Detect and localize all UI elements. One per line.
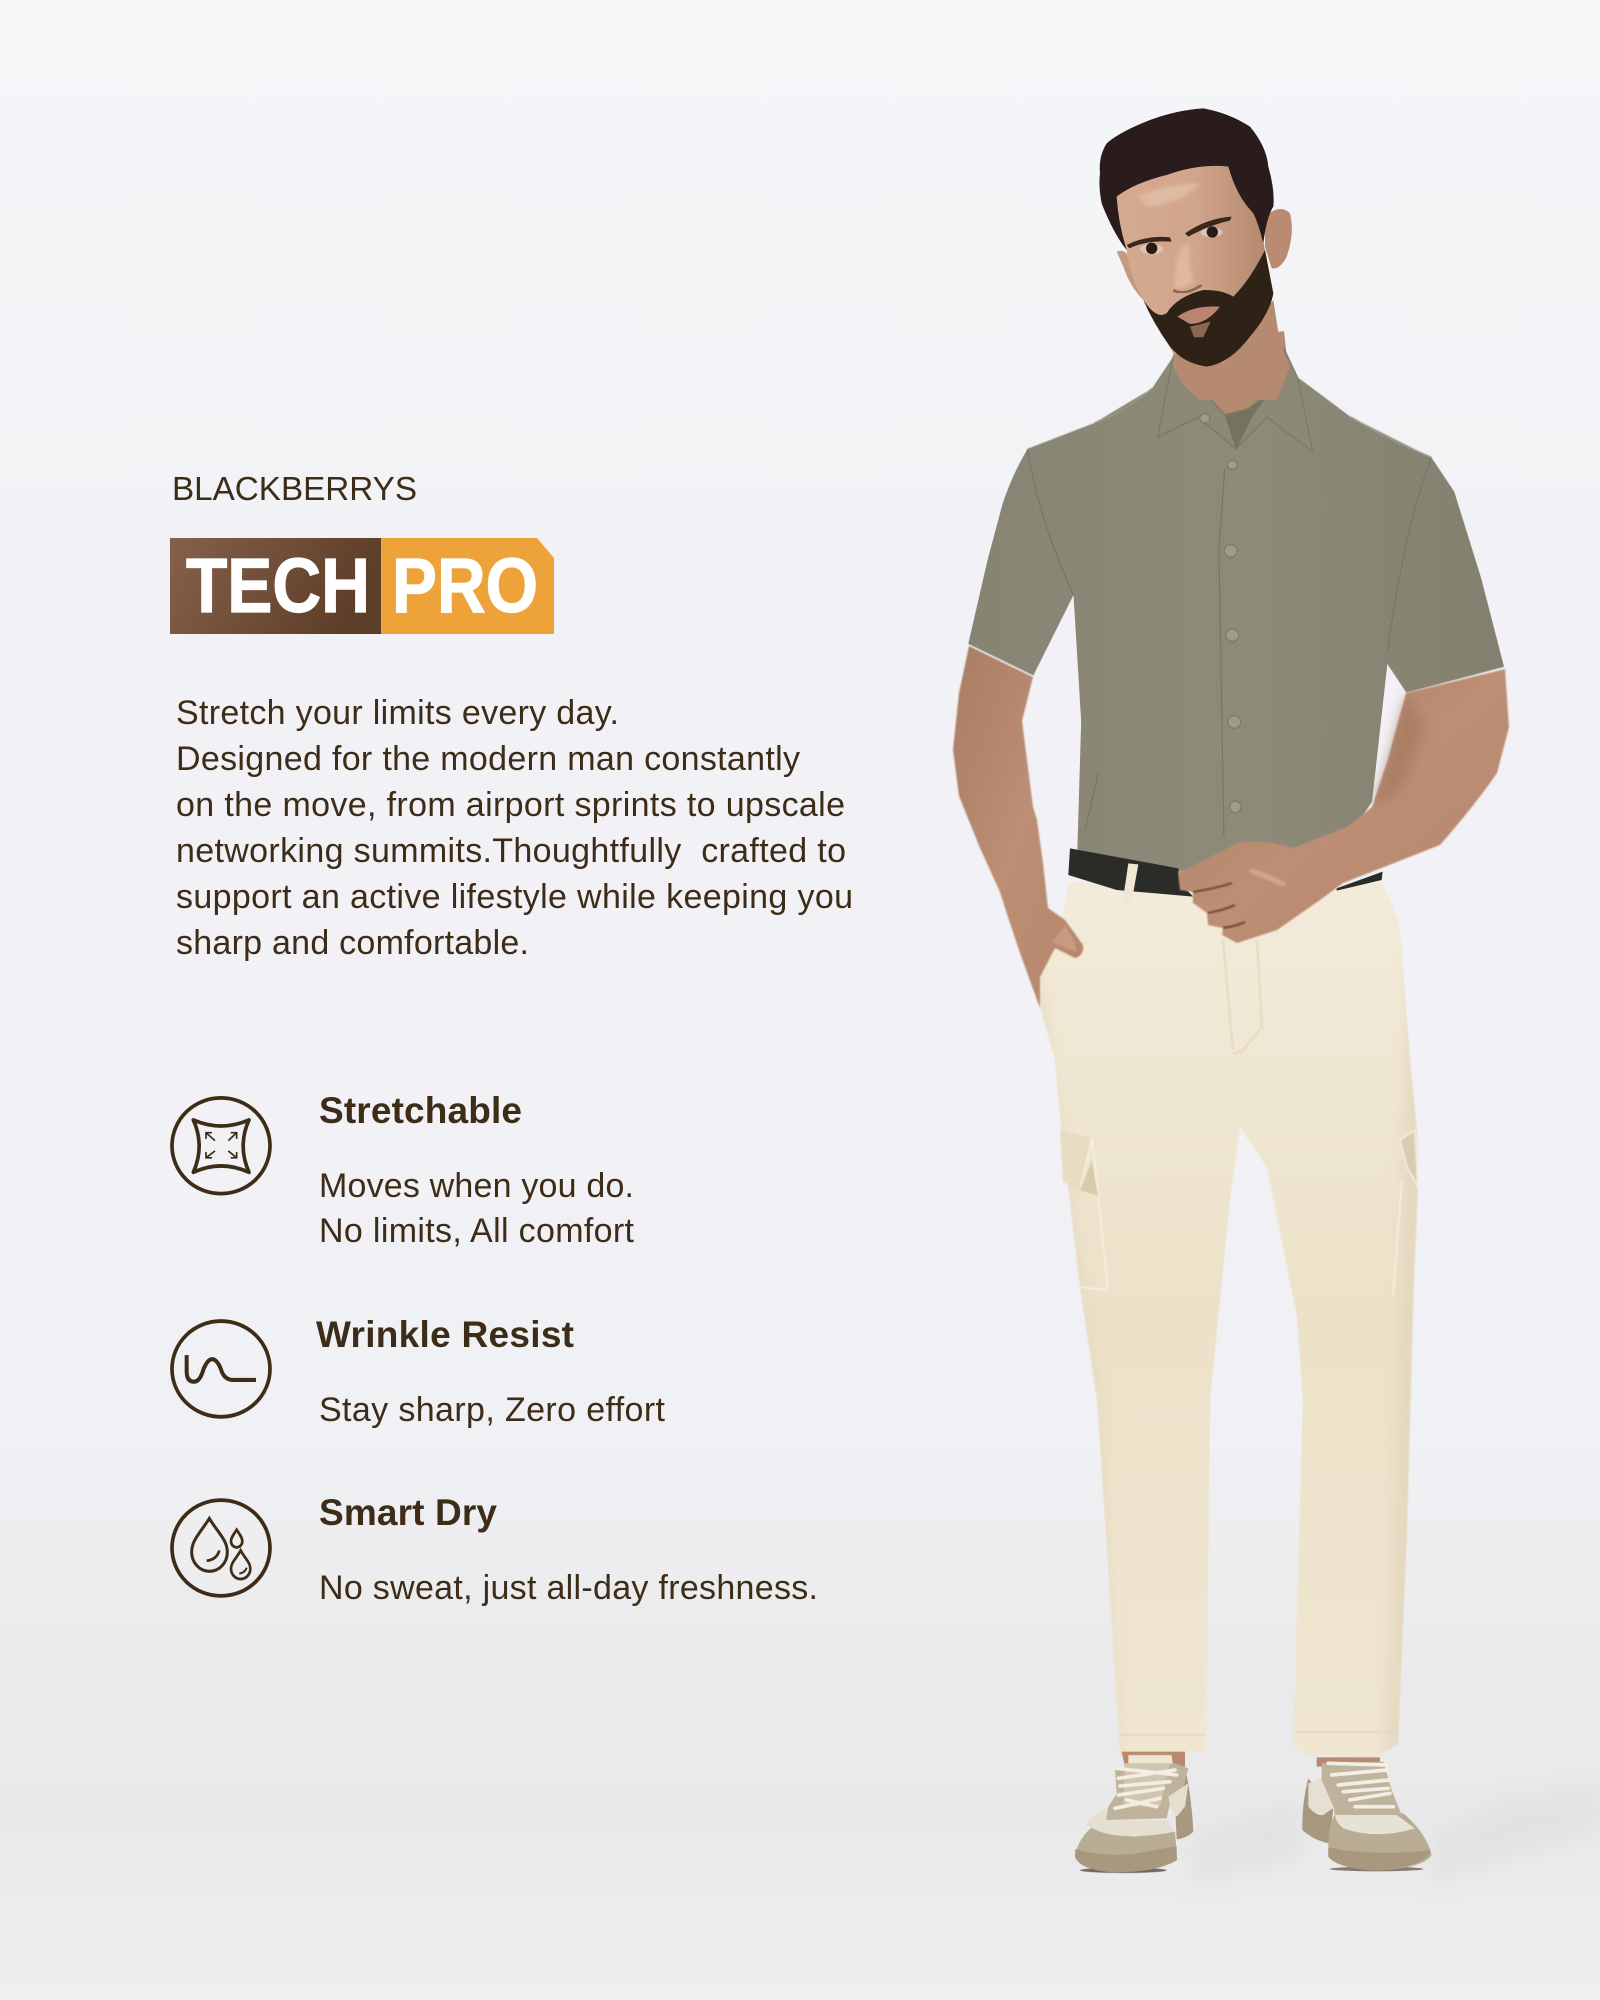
lips bbox=[1177, 306, 1220, 324]
shirt bbox=[968, 331, 1504, 872]
description paragraph: support an active lifestyle while keeping you bbox=[176, 878, 853, 916]
neck bbox=[1173, 300, 1290, 400]
icon: stretch fabric bbox=[172, 1098, 270, 1194]
belt loop bbox=[1123, 863, 1138, 902]
eyes and brows bbox=[1127, 217, 1232, 254]
description paragraph: sharp and comfortable. bbox=[176, 924, 529, 962]
feature: Stretchable: Stretchable bbox=[319, 1090, 522, 1131]
description paragraph: Stretch your limits every day. bbox=[176, 694, 619, 732]
head bbox=[1099, 108, 1292, 400]
feature: Wrinkle Resist: Wrinkle Resist bbox=[316, 1314, 574, 1355]
feature: Stretchable: No limits, All comfort bbox=[319, 1212, 635, 1250]
cargo pocket: right bbox=[1393, 1130, 1418, 1295]
belt bbox=[1068, 848, 1383, 902]
logo: Tech Pro bbox=[170, 538, 554, 634]
hair bbox=[1099, 108, 1274, 250]
beard bbox=[1143, 250, 1273, 367]
feature: Wrinkle Resist: Stay sharp, Zero effort bbox=[319, 1391, 666, 1429]
brand name: BLACKBERRYS bbox=[172, 470, 417, 507]
ears bbox=[1265, 209, 1292, 269]
feature: Stretchable bbox=[172, 1090, 635, 1250]
right shoe bbox=[1302, 1757, 1432, 1871]
description paragraph bbox=[176, 694, 853, 962]
feature: Stretchable: Moves when you do. bbox=[319, 1167, 634, 1205]
right arm and hand bbox=[1178, 669, 1509, 943]
face bbox=[1117, 166, 1273, 363]
cargo pocket: left bbox=[1060, 1130, 1108, 1290]
floor shadow bbox=[1190, 1785, 1600, 1885]
description paragraph: Designed for the modern man constantly bbox=[176, 740, 800, 778]
model figure bbox=[952, 108, 1510, 1874]
logo: Tech Pro: PRO bbox=[392, 543, 538, 629]
icon: wrinkle line bbox=[172, 1321, 270, 1417]
left arm and hand in pocket bbox=[953, 646, 1083, 1008]
feature: Smart Dry: No sweat, just all-day freshness. bbox=[319, 1569, 818, 1607]
shoes bbox=[1075, 1752, 1432, 1873]
feature: Smart Dry: Smart Dry bbox=[319, 1492, 497, 1533]
collar bbox=[1158, 348, 1313, 452]
left shoe bbox=[1075, 1752, 1193, 1873]
shirt buttons bbox=[1200, 414, 1241, 813]
description paragraph: networking summits.Thoughtfully crafted to bbox=[176, 832, 846, 870]
logo: Tech Pro: TECH bbox=[186, 543, 370, 629]
icon: water drops bbox=[172, 1500, 270, 1596]
description paragraph: on the move, from airport sprints to upscale bbox=[176, 786, 845, 824]
fly placket bbox=[1223, 940, 1262, 1054]
neck bbox=[1183, 331, 1288, 414]
feature: Smart Dry bbox=[172, 1492, 818, 1607]
feature: Wrinkle Resist bbox=[172, 1314, 666, 1429]
trousers bbox=[1030, 882, 1430, 1760]
